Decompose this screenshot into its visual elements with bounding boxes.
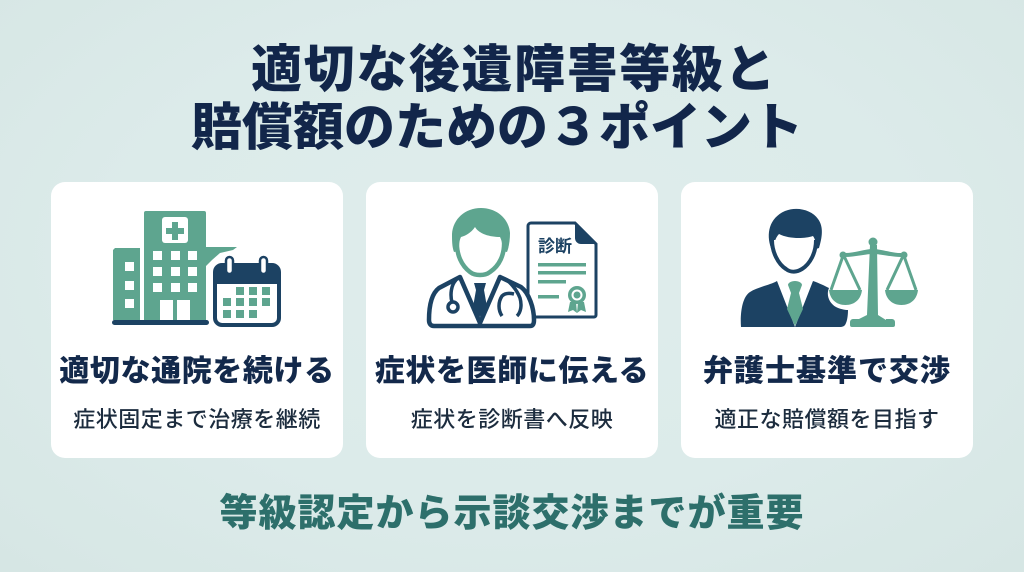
icon: doctor with diagnosis document xyxy=(429,208,596,326)
footer message: 等級認定から示談交渉までが重要 xyxy=(219,493,804,535)
heading: symptoms: 症状を医師に伝える xyxy=(375,355,649,388)
panel: tell symptoms to doctor xyxy=(366,182,658,458)
panel: lawyer standard negotiation xyxy=(681,182,973,458)
caption: negotiation: 適正な賠償額を目指す xyxy=(714,407,940,432)
caption: visits: 症状固定まで治療を継続 xyxy=(73,407,321,432)
title: 賠償額のための３ポイント xyxy=(191,99,803,156)
title xyxy=(191,41,803,156)
heading: visits: 適切な通院を続ける xyxy=(59,355,335,388)
icon: hospital and calendar xyxy=(112,211,282,329)
icon: lawyer with scales of justice xyxy=(741,209,918,327)
title: 適切な後遺障害等級と xyxy=(251,41,777,98)
heading: negotiation: 弁護士基準で交渉 xyxy=(703,355,951,388)
panel: regular hospital visits xyxy=(51,182,343,458)
icon: doctor with diagnosis document: 診断 xyxy=(538,237,572,256)
caption: symptoms: 症状を診断書へ反映 xyxy=(411,407,613,432)
